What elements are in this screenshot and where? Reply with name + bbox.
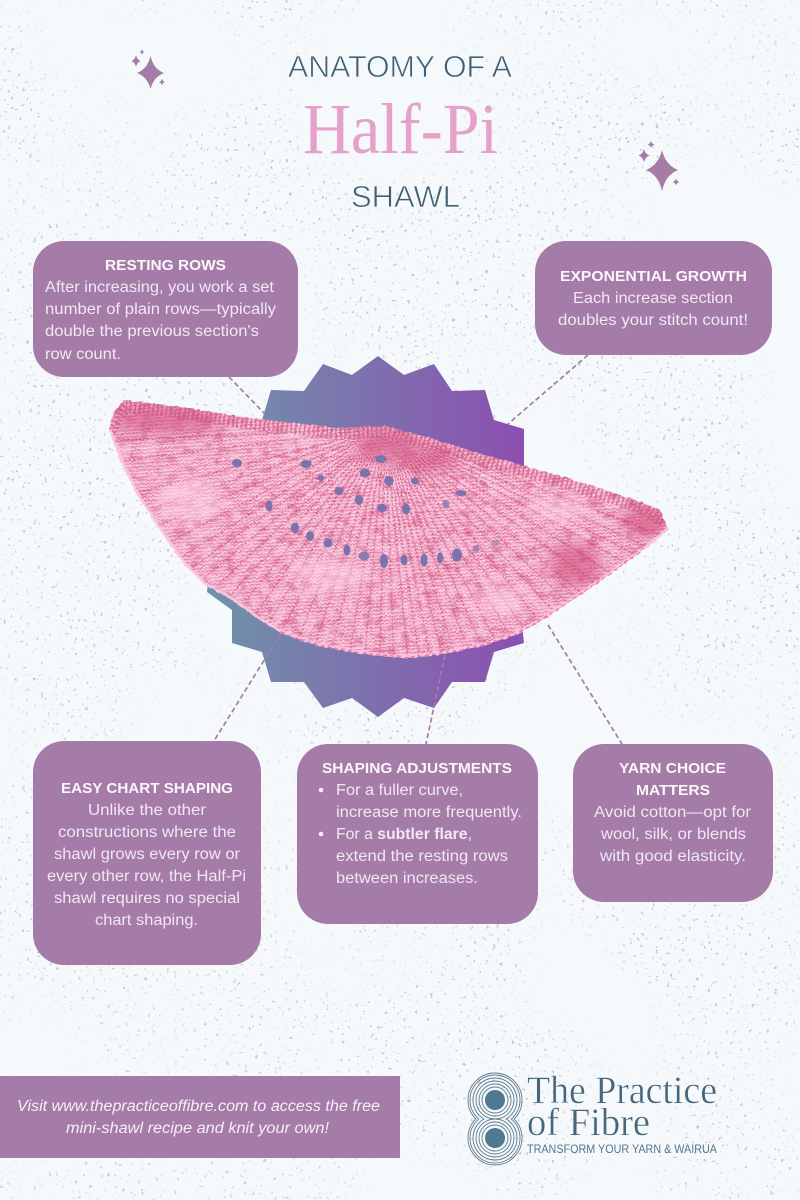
panel: resting rows: row count. <box>45 346 121 363</box>
panel: easy chart shaping: constructions where the <box>58 824 236 841</box>
panel: shaping adjustments: increase more frequently. <box>336 804 522 821</box>
panel: shaping adjustments: For a subtler flare, <box>336 826 472 843</box>
panel: easy chart shaping: chart shaping. <box>95 912 198 929</box>
panel: yarn choice matters: with good elasticity. <box>599 848 746 865</box>
pale dye patches <box>160 426 590 614</box>
logo wordmark: The Practice <box>527 1069 717 1112</box>
stitch fan <box>120 428 660 658</box>
logo wordmark: TRANSFORM YOUR YARN & WAIRUA <box>527 1144 717 1156</box>
panel: shaping adjustments: For a fuller curve, <box>336 782 463 799</box>
dark dye patches <box>110 406 669 587</box>
title: SHAWL <box>351 179 460 214</box>
connector lines <box>214 355 622 744</box>
logo wordmark <box>527 1069 717 1156</box>
icon: sparkles right <box>638 141 680 191</box>
shawl eyelets <box>232 455 500 568</box>
panel: yarn choice matters: wool, silk, or blends <box>600 826 746 843</box>
panel: resting rows: After increasing, you work a set <box>45 279 275 296</box>
footer call to action: Visit www.thepracticeoffibre.com to access the free <box>17 1098 380 1115</box>
panel: easy chart shaping: EASY CHART SHAPING <box>61 780 233 797</box>
panel: exponential growth: Each increase section <box>573 290 733 307</box>
panel: easy chart shaping <box>33 741 261 965</box>
bottom cord edge <box>109 430 668 658</box>
title <box>288 49 512 214</box>
panel: resting rows <box>33 241 298 377</box>
panel: yarn choice matters: Avoid cotton—opt for <box>594 804 751 821</box>
panel: exponential growth: EXPONENTIAL GROWTH <box>560 268 747 285</box>
panel: yarn choice matters: MATTERS <box>636 782 710 799</box>
icon: sparkles left <box>132 49 165 89</box>
knitted shawl photo <box>109 400 668 658</box>
panel: resting rows: number of plain rows—typically <box>45 301 276 318</box>
footer call to action: mini-shawl recipe and knit your own! <box>66 1120 330 1137</box>
panel: shaping adjustments: extend the resting rows <box>336 848 508 865</box>
logo mark <box>468 1073 522 1165</box>
logo wordmark: of Fibre <box>527 1101 650 1144</box>
panel: easy chart shaping: shawl requires no special <box>54 890 240 907</box>
title: Half-Pi <box>303 89 498 169</box>
panel: yarn choice matters: YARN CHOICE <box>619 760 726 777</box>
panel: resting rows: double the previous section's <box>45 323 259 340</box>
panel: easy chart shaping: every other row, the Half-Pi <box>47 868 246 885</box>
panel: shaping adjustments: between increases. <box>336 870 478 887</box>
panel: easy chart shaping: shawl grows every row or <box>54 846 240 863</box>
panel: shaping adjustments: SHAPING ADJUSTMENTS <box>322 760 512 777</box>
panel: easy chart shaping: Unlike the other <box>88 802 206 819</box>
footer call to action <box>0 1076 400 1158</box>
panel: resting rows: RESTING ROWS <box>105 257 226 274</box>
title: ANATOMY OF A <box>288 49 512 84</box>
top ribbed border <box>109 404 664 520</box>
panel: yarn choice matters <box>573 744 773 902</box>
panel: shaping adjustments <box>297 744 538 924</box>
panel: exponential growth: doubles your stitch count! <box>558 312 748 329</box>
starburst behind shawl <box>207 356 524 717</box>
panel: exponential growth <box>535 241 772 355</box>
